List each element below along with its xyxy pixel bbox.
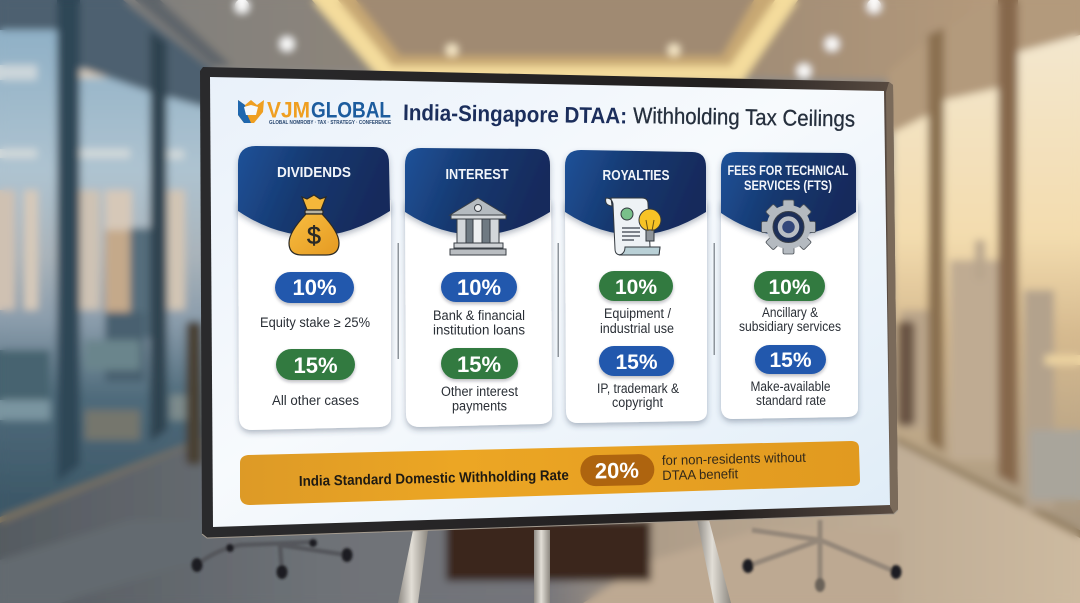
right window top band xyxy=(888,0,1080,135)
15% pill: 15% xyxy=(293,353,338,378)
panel: interest xyxy=(405,148,552,427)
10% pill xyxy=(441,272,517,302)
royalties header xyxy=(565,150,706,235)
15% pill xyxy=(441,348,518,379)
floor xyxy=(0,420,1080,603)
icon: bank xyxy=(450,198,506,255)
icon: money bag xyxy=(289,195,339,255)
dividends heading: DIVIDENDS xyxy=(277,165,351,181)
banner note: DTAA benefit xyxy=(662,466,739,483)
panel: royalties xyxy=(565,150,707,423)
other interest label: Other interest xyxy=(441,384,518,399)
banner: domestic withholding rate xyxy=(240,441,860,505)
icon: gear xyxy=(762,200,816,254)
icon: scroll and light bulb xyxy=(606,198,661,255)
20% pill: 20% xyxy=(595,458,639,483)
interest card body xyxy=(405,200,552,427)
equipment label: industrial use xyxy=(600,321,674,336)
10% pill xyxy=(275,272,354,303)
15% pill xyxy=(599,346,674,376)
ancillary label: Ancillary & xyxy=(762,305,818,320)
ip label: copyright xyxy=(612,395,663,410)
fts header xyxy=(721,152,856,236)
right window glass xyxy=(893,0,1080,530)
easel legs xyxy=(398,520,731,603)
15% pill: 15% xyxy=(457,352,501,377)
15% pill xyxy=(755,345,826,374)
title continuation: Withholding Tax Ceilings xyxy=(633,103,855,131)
logo: VJM Global: VJM xyxy=(267,98,310,122)
interest heading: INTEREST xyxy=(446,167,509,183)
20% pill xyxy=(580,454,655,486)
logo: VJM Global: GLOBAL NOMROBY · TAX · STRATEGY · CONFERENCE xyxy=(269,120,391,126)
equipment label: Equipment / xyxy=(604,306,671,321)
royalties card body xyxy=(565,200,707,423)
15% pill xyxy=(276,349,355,380)
10% pill: 10% xyxy=(292,275,337,300)
royalties heading: ROYALTIES xyxy=(602,168,670,184)
wooden box behind easel xyxy=(446,520,651,581)
chair bases xyxy=(192,520,902,592)
banner label: India Standard Domestic Withholding Rate xyxy=(299,468,569,490)
ceiling xyxy=(123,0,1000,82)
10% pill xyxy=(599,271,673,301)
left window top band xyxy=(0,0,215,110)
10% pill xyxy=(754,271,825,301)
icon: money bag: $ xyxy=(307,222,321,250)
15% pill: 15% xyxy=(769,349,812,372)
window columns xyxy=(57,0,1018,486)
panel: fees for technical services xyxy=(721,152,858,419)
fts heading: FEES FOR TECHNICAL xyxy=(728,163,848,178)
10% pill: 10% xyxy=(768,276,811,299)
make-available label: Make-available xyxy=(750,379,830,394)
banner bar xyxy=(240,441,860,505)
dividends card body xyxy=(238,200,391,430)
panel: dividends xyxy=(238,146,391,430)
screen panel xyxy=(210,77,890,527)
bank loans label: institution loans xyxy=(433,322,525,338)
other interest label: payments xyxy=(452,398,507,414)
ancillary label: subsidiary services xyxy=(739,319,841,334)
left window glass xyxy=(0,0,213,517)
dividends header xyxy=(238,146,390,236)
10% pill: 10% xyxy=(457,275,501,300)
fts card body xyxy=(721,200,858,419)
fts heading: SERVICES (FTS) xyxy=(744,178,832,193)
15% pill: 15% xyxy=(615,351,658,374)
make-available label: standard rate xyxy=(756,393,826,408)
bank loans label: Bank & financial xyxy=(433,308,525,323)
logo: VJM Global: GLOBAL xyxy=(311,98,391,122)
banner note: for non-residents without xyxy=(662,450,806,468)
title: India-Singapore DTAA: xyxy=(403,100,627,129)
equity stake label: Equity stake ≥ 25% xyxy=(260,315,370,330)
interest header xyxy=(405,148,550,235)
logo: VJM Global xyxy=(238,98,391,126)
display board frame xyxy=(200,67,898,538)
all other cases label: All other cases xyxy=(272,393,359,408)
10% pill: 10% xyxy=(615,276,657,299)
chair backs xyxy=(186,321,915,465)
ip label: IP, trademark & xyxy=(597,381,679,396)
